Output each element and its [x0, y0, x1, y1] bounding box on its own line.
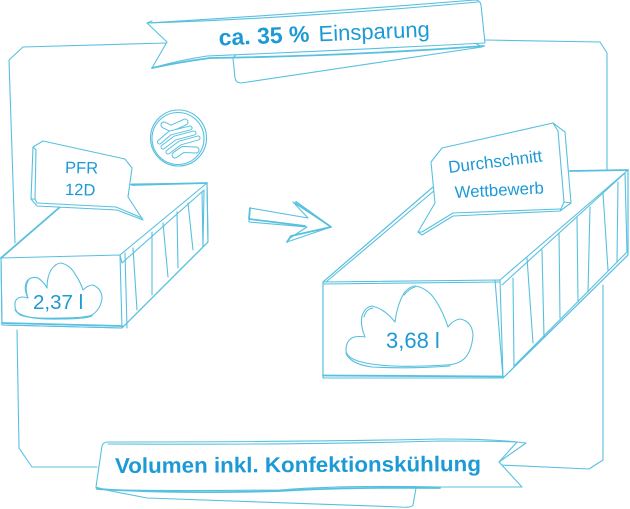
bottom ribbon: volume	[96, 439, 526, 507]
speech bubble: PFR 12D: 12D	[65, 181, 96, 200]
speech bubble: PFR 12D: PFR	[65, 159, 98, 178]
right container: competitor average	[323, 170, 628, 378]
arrow: left to right	[249, 202, 331, 242]
ribbon text: ca. 35 % Einsparung	[218, 16, 430, 50]
cloud: 3,68 l	[346, 286, 473, 368]
speech bubble: PFR 12D	[31, 141, 143, 220]
icon: circuit badge	[150, 110, 206, 166]
speech bubble: Durchschnitt Wettbewerb	[418, 123, 571, 235]
cloud: 3,68 l: 3,68 l	[386, 328, 440, 353]
top ribbon: savings	[147, 0, 485, 83]
speech bubble: Durchschnitt Wettbewerb: Durchschnitt	[447, 147, 544, 177]
cloud: 2,37 l	[15, 263, 102, 319]
speech bubble: Durchschnitt Wettbewerb: Wettbewerb	[454, 178, 544, 202]
ribbon text: Volumen inkl. Konfektionskühlung	[115, 452, 481, 478]
left container: PFR 12D	[1, 183, 208, 328]
cloud: 2,37 l: 2,37 l	[33, 291, 83, 314]
